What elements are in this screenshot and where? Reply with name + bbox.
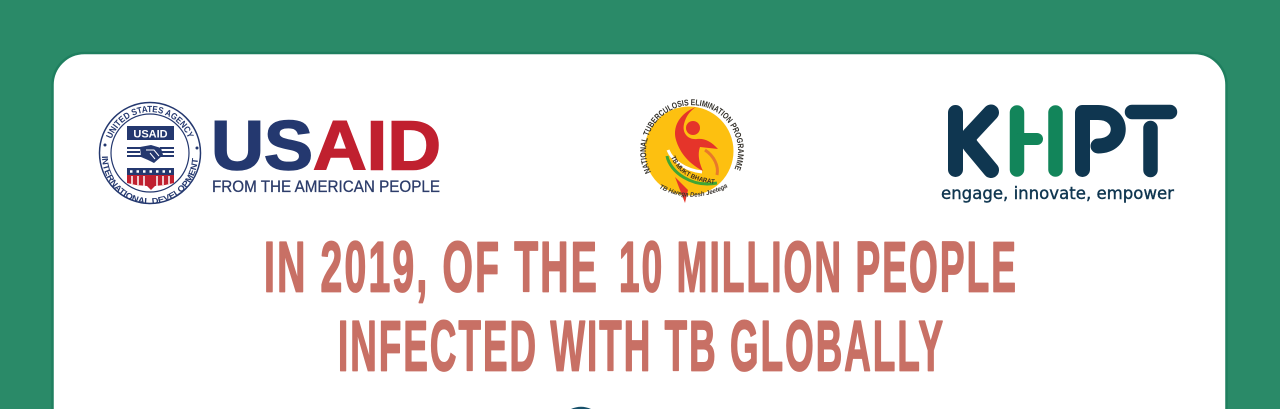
icon: cropped ring at bottom edge (571, 407, 591, 409)
label: TB Harega Desh Jeetega: TB Harega Desh Jeetega (660, 184, 728, 198)
icon: USAID seal: INTERNATIONAL DEVELOPMENT (102, 156, 198, 204)
icon: yellow disc (644, 106, 734, 196)
title (264, 228, 1018, 386)
title line 1 left: IN 2019, OF THE (264, 228, 599, 308)
letter H (1017, 112, 1056, 170)
icon: USAID seal: USAID (133, 128, 168, 140)
ring text: NATIONAL TUBERCULOSIS ELIMINATION PROGRAMME (640, 99, 744, 174)
wordmark: US: US (211, 106, 313, 184)
panel: white card (52, 53, 1226, 409)
logo: KHPT (941, 112, 1174, 204)
icon: USAID seal: UNITED STATES AGENCY (106, 106, 194, 138)
logo: USAID (98, 102, 441, 204)
tagline: from the american people: FROM THE AMERICAN PEOPLE (212, 177, 440, 196)
letter P (1082, 112, 1118, 170)
label: TB Mukt Bharat: TB MUKT BHARAT (672, 155, 715, 184)
icon: USAID seal (98, 102, 202, 204)
letter K (956, 112, 991, 170)
tagline: engage, innovate, empower: engage, innovate, empower (941, 184, 1174, 204)
logo: National TB Elimination Programme (640, 99, 744, 203)
icon: running figure (667, 107, 718, 203)
letter T (1132, 112, 1170, 170)
wordmark: AID: AID (313, 106, 441, 184)
